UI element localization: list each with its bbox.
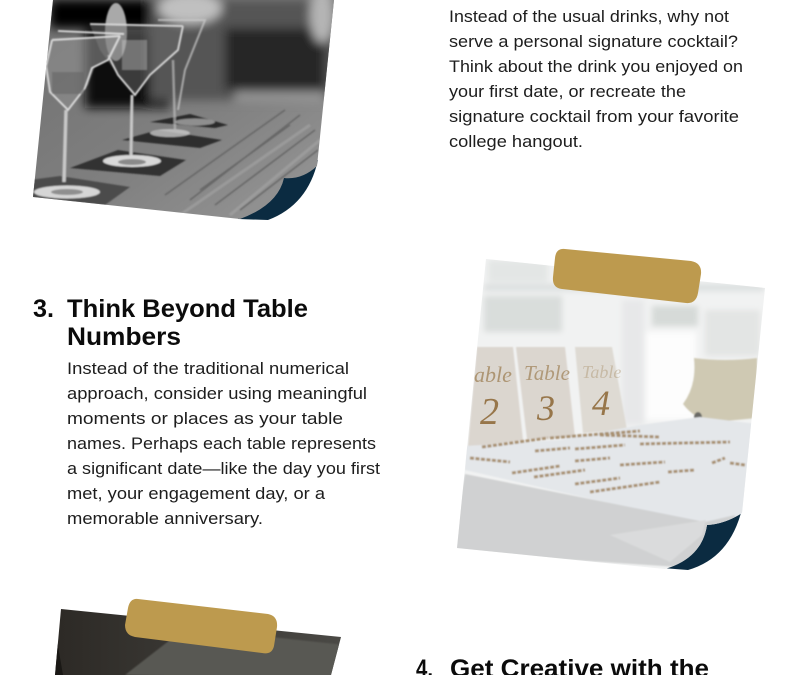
- tip 3 heading: [33, 295, 308, 351]
- tip 3 body text: approach, consider using meaningful: [67, 384, 367, 403]
- tip 3 body text: names. Perhaps each table represents: [67, 434, 376, 453]
- card lettering: 4: [592, 383, 610, 423]
- tip 2 body text: college hangout.: [449, 132, 583, 151]
- tip 3 body text: a significant date—like the day you first: [67, 459, 380, 478]
- navy corner behind photo 3: [662, 509, 742, 570]
- tip 2 body text: Think about the drink you enjoyed on: [449, 57, 743, 76]
- wood grain: [165, 110, 318, 210]
- card lettering: able: [474, 362, 512, 387]
- tip 3 body text: met, your engagement day, or a: [67, 484, 326, 503]
- tip 3 heading: Think Beyond Table: [67, 295, 308, 323]
- card lettering: 3: [536, 388, 555, 428]
- tip 3 heading: 3.: [33, 295, 54, 323]
- card lettering: Table: [524, 361, 570, 385]
- photo: dark interior with gold tape: [50, 599, 350, 675]
- tip 2 body text: [449, 7, 743, 151]
- tip 3 body text: Instead of the traditional numerical: [67, 359, 349, 378]
- lime slice: [105, 3, 127, 61]
- tip 3 heading: Numbers: [67, 323, 181, 351]
- card lettering: Table: [582, 362, 621, 382]
- card lettering: [474, 365, 621, 424]
- back glass: [158, 20, 205, 110]
- vase: [683, 358, 757, 422]
- photo: cocktail glasses on bar: [25, 0, 340, 225]
- table numbers: [468, 347, 523, 447]
- front glass: [47, 37, 110, 108]
- photo: table numbers on white tablecloth: [450, 249, 770, 575]
- middle glass: [90, 25, 183, 95]
- tip 3 body text: moments or places as your table: [67, 409, 343, 428]
- scattered letter tiles: [470, 431, 745, 492]
- gold tape on photo 3: [553, 249, 701, 303]
- tip 3 body text: [67, 359, 380, 528]
- tip 2 body text: Instead of the usual drinks, why not: [449, 7, 729, 26]
- gold tape on photo 4: [125, 599, 277, 653]
- card lettering: 2: [480, 391, 499, 433]
- tip 2 body text: signature cocktail from your favorite: [449, 107, 739, 126]
- tip 3 body text: memorable anniversary.: [67, 509, 263, 528]
- table top: [465, 417, 765, 525]
- coasters: [70, 150, 186, 176]
- navy corner behind photo 1: [238, 160, 318, 220]
- tip 2 body text: your first date, or recreate the: [449, 82, 686, 101]
- tip 2 body text: serve a personal signature cocktail?: [449, 32, 738, 51]
- lower cloth: [450, 474, 735, 570]
